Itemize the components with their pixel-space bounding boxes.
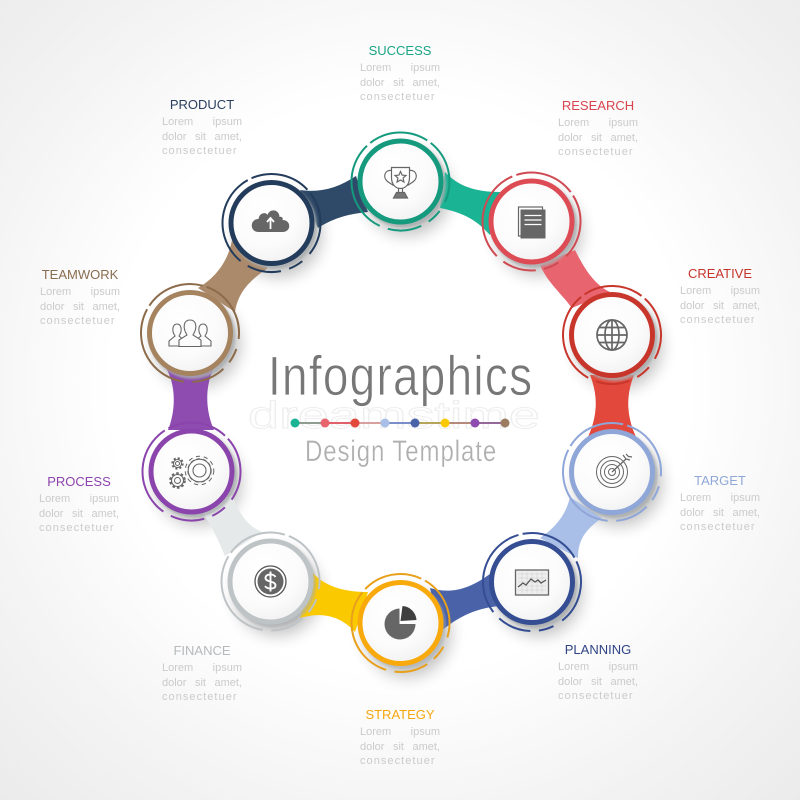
text: target: sit — [713, 507, 724, 519]
node: planning — [467, 517, 597, 647]
text: success: dolor — [360, 77, 384, 89]
text: finance: dolor — [162, 677, 186, 689]
text: product: dolor — [162, 131, 186, 143]
text: strategy — [360, 707, 440, 767]
text: research: Lorem — [558, 117, 589, 129]
ribbon: teamwork to product — [198, 240, 268, 312]
ribbon: planning to strategy — [430, 574, 500, 632]
text: planning: ipsum — [609, 661, 638, 673]
node: product — [203, 154, 340, 292]
text: finance: FINANCE — [173, 643, 231, 658]
text: finance: amet, — [214, 677, 242, 689]
icon: people — [169, 320, 211, 346]
text: target: consectetuer — [680, 521, 756, 533]
text: product: ipsum — [213, 116, 242, 128]
text: success: ipsum — [411, 62, 440, 74]
text: creative — [680, 266, 760, 326]
node: research — [464, 154, 599, 289]
text: strategy: STRATEGY — [365, 707, 435, 722]
ribbon: finance to process — [200, 495, 262, 556]
text: target: ipsum — [731, 492, 760, 504]
text: process: amet, — [91, 508, 119, 520]
text: planning: PLANNING — [565, 642, 631, 657]
text: teamwork: ipsum — [91, 286, 120, 298]
text: strategy: dolor — [360, 741, 384, 753]
icon: trophy — [385, 168, 416, 198]
node: creative — [543, 266, 681, 404]
ribbon: creative to target — [588, 375, 636, 437]
text: planning: amet, — [610, 676, 638, 688]
colour timeline — [290, 418, 510, 428]
text: target: TARGET — [694, 473, 746, 488]
node: process — [122, 402, 261, 541]
text: product — [162, 97, 242, 157]
text: strategy: Lorem — [360, 726, 391, 738]
text: process: dolor — [39, 508, 63, 520]
text: success: Lorem — [360, 62, 391, 74]
title: Infographics: Infographics — [268, 345, 532, 407]
icon: chart — [516, 570, 548, 595]
text: strategy: consectetuer — [360, 755, 436, 767]
text: strategy: sit — [393, 741, 404, 753]
node: target — [550, 410, 674, 534]
icon: gears — [170, 458, 212, 488]
text: teamwork: dolor — [40, 301, 64, 313]
soft drop shadows — [154, 150, 662, 677]
text: finance: ipsum — [213, 662, 242, 674]
text: teamwork: Lorem — [40, 286, 71, 298]
subtitle: Design Template: Design Template — [305, 433, 496, 468]
text: process: ipsum — [90, 493, 119, 505]
text: teamwork: consectetuer — [40, 315, 116, 327]
text: success — [360, 43, 440, 103]
ribbon: research to creative — [540, 250, 610, 308]
text: planning — [558, 642, 638, 702]
text: creative: CREATIVE — [688, 266, 752, 281]
text: target: dolor — [680, 507, 704, 519]
ribbon: target to planning — [540, 497, 602, 558]
text: creative: amet, — [732, 300, 760, 312]
text: strategy: amet, — [412, 741, 440, 753]
text: target — [680, 473, 760, 533]
text: creative: dolor — [680, 300, 704, 312]
text: creative: sit — [713, 300, 724, 312]
icon: globe — [597, 320, 627, 350]
icon: dollar coin — [255, 566, 286, 597]
text: product: Lorem — [162, 116, 193, 128]
text: research: dolor — [558, 132, 582, 144]
text: finance: Lorem — [162, 662, 193, 674]
text: planning: sit — [591, 676, 602, 688]
text: creative: ipsum — [731, 285, 760, 297]
node: strategy — [334, 556, 467, 690]
text: creative: consectetuer — [680, 314, 756, 326]
text: process: PROCESS — [47, 474, 111, 489]
text: research: ipsum — [609, 117, 638, 129]
text: planning: Lorem — [558, 661, 589, 673]
ribbon: product to success — [300, 176, 368, 228]
text: research: amet, — [610, 132, 638, 144]
text: target: amet, — [732, 507, 760, 519]
icon: pie chart — [384, 606, 416, 639]
text: finance — [162, 643, 242, 703]
text: process: sit — [72, 508, 83, 520]
text: product: consectetuer — [162, 145, 238, 157]
text: success: amet, — [412, 77, 440, 89]
text: finance: sit — [195, 677, 206, 689]
text: finance: consectetuer — [162, 691, 238, 703]
text: product: PRODUCT — [170, 97, 234, 112]
text: teamwork: amet, — [92, 301, 120, 313]
node: teamwork — [127, 270, 253, 396]
text: success: sit — [393, 77, 404, 89]
text: teamwork: sit — [73, 301, 84, 313]
text: target: Lorem — [680, 492, 711, 504]
text: process: consectetuer — [39, 522, 115, 534]
watermark: dreamstime — [248, 395, 540, 437]
text: success: SUCCESS — [369, 43, 431, 58]
text: research: sit — [591, 132, 602, 144]
ribbon: process to teamwork — [166, 368, 214, 430]
text: success: consectetuer — [360, 91, 436, 103]
text: creative: Lorem — [680, 285, 711, 297]
icon: documents — [518, 207, 546, 238]
node: finance — [207, 518, 334, 645]
node: success — [332, 113, 469, 250]
icon: cloud upload — [252, 210, 289, 232]
icon: target — [596, 454, 632, 488]
text: research: RESEARCH — [562, 98, 634, 113]
text: product: amet, — [214, 131, 242, 143]
text: process — [39, 474, 119, 534]
text: teamwork: TEAMWORK — [42, 267, 118, 282]
text: strategy: ipsum — [411, 726, 440, 738]
text: planning: dolor — [558, 676, 582, 688]
text: research — [558, 98, 638, 158]
ribbon: success to research — [440, 172, 500, 235]
text: research: consectetuer — [558, 146, 634, 158]
text: planning: consectetuer — [558, 690, 634, 702]
ribbon: strategy to finance — [300, 572, 368, 632]
text: teamwork — [40, 267, 120, 327]
text: product: sit — [195, 131, 206, 143]
text: process: Lorem — [39, 493, 70, 505]
